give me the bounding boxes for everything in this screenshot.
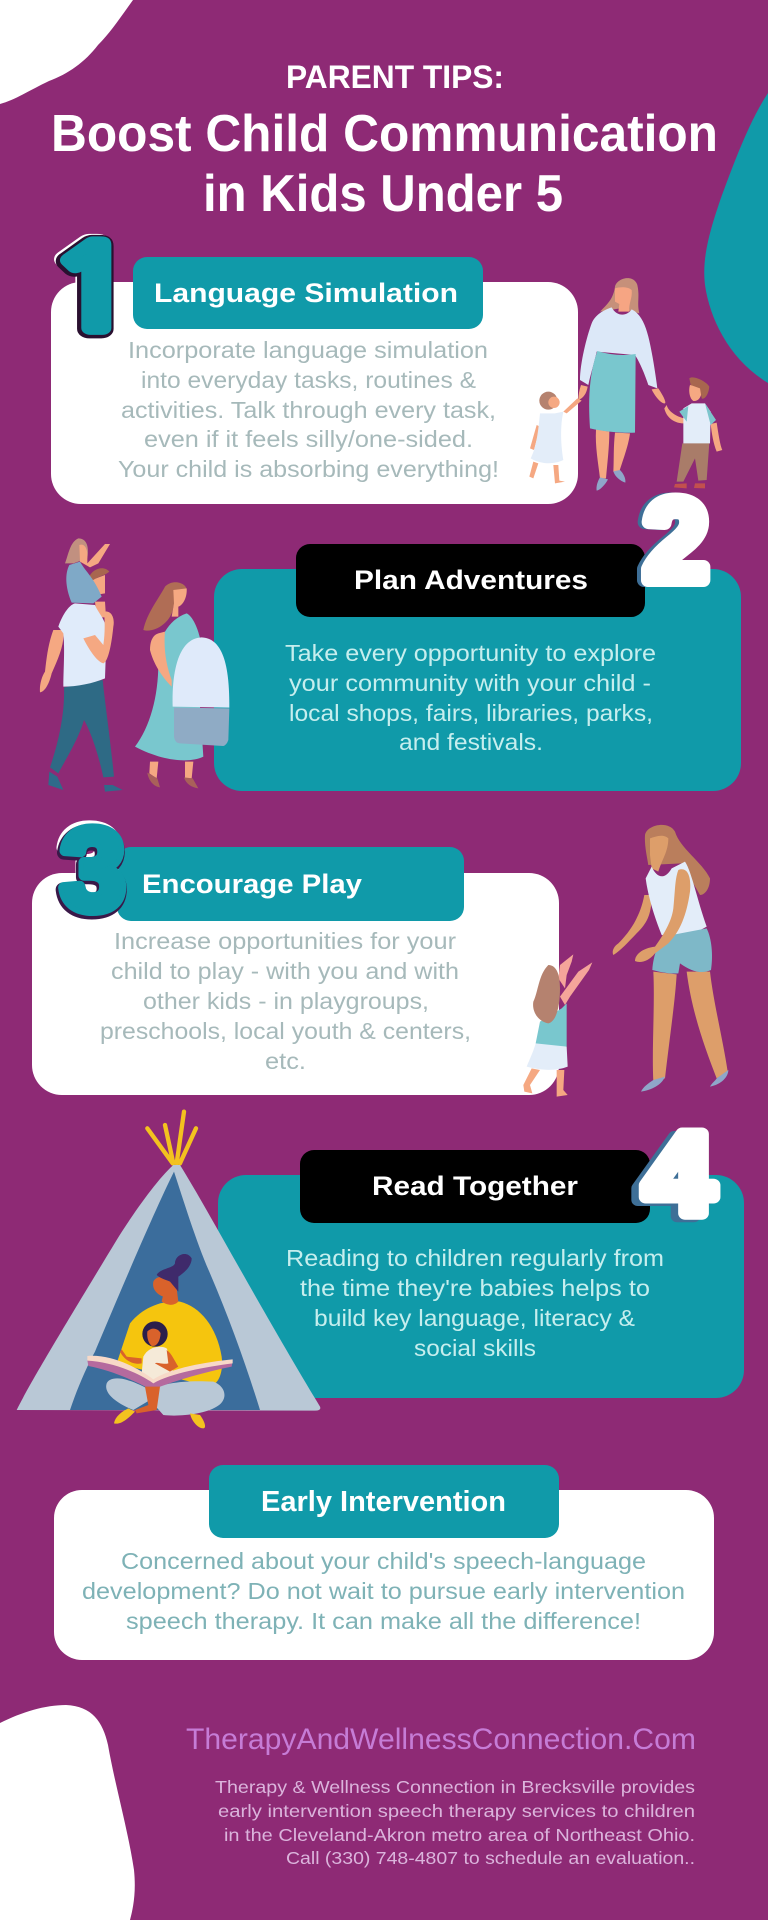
heading tag: plan adventures: Plan Adventures bbox=[354, 565, 588, 595]
footer text: Call (330) 748-4807 to schedule an evaluation.. bbox=[286, 1848, 695, 1868]
decorative blob: right teal bbox=[704, 93, 768, 383]
body text: plan adventures: and festivals. bbox=[399, 729, 543, 755]
number 3: 3 bbox=[58, 803, 122, 931]
body text: early intervention bbox=[82, 1548, 685, 1634]
body text: read together: build key language, literacy & bbox=[314, 1305, 635, 1331]
body text: encourage play: etc. bbox=[265, 1048, 306, 1074]
decorative blob: bottom left bbox=[0, 1705, 135, 1920]
body text: language simulation: Incorporate language simulation bbox=[128, 337, 488, 363]
panel: encourage play bbox=[32, 847, 559, 1095]
body text: read together: Reading to children regularly from bbox=[286, 1245, 664, 1271]
body text: early intervention: speech therapy. It can make all the difference! bbox=[126, 1608, 641, 1634]
body text: plan adventures: your community with your child - bbox=[289, 670, 651, 696]
title: PARENT TIPS: bbox=[286, 59, 504, 95]
panel: early intervention bbox=[54, 1465, 714, 1660]
body text: encourage play: Increase opportunities for your bbox=[114, 928, 456, 954]
heading tag: encourage play bbox=[117, 847, 464, 921]
website link: TherapyAndWellnessConnection.Com bbox=[186, 1723, 696, 1756]
body text: encourage play: other kids - in playgroups, bbox=[143, 988, 429, 1014]
number 4: 4 bbox=[636, 1113, 706, 1241]
body text: language simulation: into everyday tasks, routines & bbox=[141, 367, 476, 393]
footer text: early intervention speech therapy services to children bbox=[218, 1801, 695, 1821]
heading tag: read together: Read Together bbox=[372, 1171, 579, 1201]
footer text bbox=[215, 1777, 695, 1868]
illustration: mother reaching to child bbox=[523, 825, 728, 1097]
body text: language simulation bbox=[118, 337, 499, 482]
body text: read together: social skills bbox=[414, 1335, 536, 1361]
decorative blob: top left bbox=[0, 0, 133, 104]
body text: read together bbox=[286, 1245, 664, 1361]
body text: read together: the time they're babies helps to bbox=[300, 1275, 650, 1301]
heading tag: encourage play: Encourage Play bbox=[142, 869, 362, 899]
body text: encourage play: preschools, local youth & centers, bbox=[100, 1018, 471, 1044]
number 4: 4 bbox=[644, 1110, 714, 1238]
body text: encourage play bbox=[100, 928, 471, 1074]
number 3: 3 bbox=[60, 808, 124, 936]
body text: plan adventures bbox=[285, 640, 656, 755]
body text: plan adventures: Take every opportunity to explore bbox=[285, 640, 656, 666]
number 1: 1 bbox=[44, 232, 134, 346]
heading tag: language simulation bbox=[133, 257, 483, 329]
panel: read together bbox=[218, 1150, 744, 1398]
footer text: in the Cleveland-Akron metro area of Northeast Ohio. bbox=[224, 1825, 695, 1845]
panel: plan adventures bbox=[214, 544, 741, 791]
illustration: mother and child reading in teepee bbox=[17, 1112, 320, 1428]
body text: plan adventures: local shops, fairs, libraries, parks, bbox=[289, 700, 653, 726]
body text: language simulation: even if it feels silly/one-sided. bbox=[144, 426, 473, 452]
illustration: mother with two children bbox=[529, 278, 722, 491]
illustration: family walking bbox=[40, 538, 229, 792]
number 2: 2 bbox=[640, 477, 704, 605]
number 1: 1 bbox=[47, 234, 137, 348]
body text: language simulation: Your child is absorbing everything! bbox=[118, 456, 499, 482]
heading tag: language simulation: Language Simulation bbox=[154, 278, 458, 308]
number 3: 3 bbox=[61, 806, 125, 934]
panel: language simulation bbox=[51, 257, 578, 504]
title bbox=[51, 59, 718, 223]
title: Boost Child Communication bbox=[51, 105, 718, 163]
number 2: 2 bbox=[644, 477, 708, 605]
body text: encourage play: child to play - with you and with bbox=[111, 958, 459, 984]
heading tag: early intervention: Early Intervention bbox=[261, 1486, 506, 1518]
title: in Kids Under 5 bbox=[203, 165, 563, 223]
number 1: 1 bbox=[48, 233, 138, 347]
body text: language simulation: activities. Talk through every task, bbox=[121, 397, 496, 423]
heading tag: read together bbox=[300, 1150, 650, 1223]
footer text: Therapy & Wellness Connection in Brecksville provides bbox=[215, 1777, 695, 1797]
heading tag: early intervention bbox=[209, 1465, 559, 1538]
heading tag: plan adventures bbox=[296, 544, 645, 617]
body text: early intervention: Concerned about your child's speech-language bbox=[121, 1548, 646, 1574]
body text: early intervention: development? Do not wait to pursue early intervention bbox=[82, 1578, 685, 1604]
